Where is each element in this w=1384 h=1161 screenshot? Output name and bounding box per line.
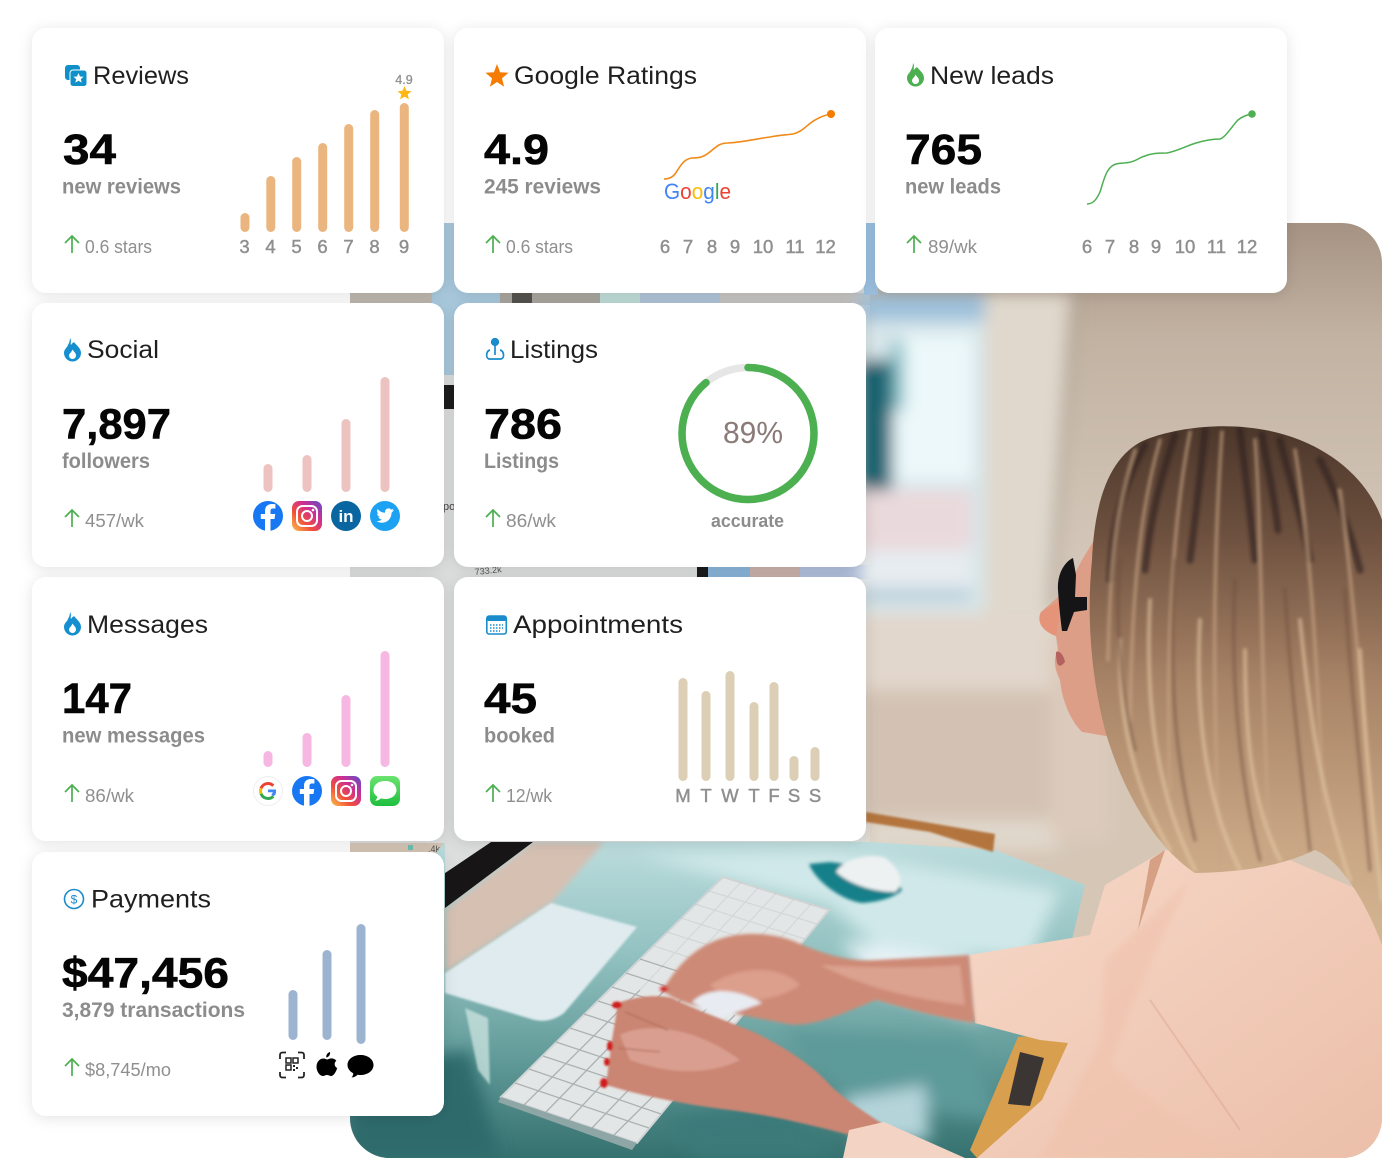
icon: linkedin: in [338,507,354,526]
sub label: 3,879 transactions [62,999,245,1022]
trend arrow [907,236,921,253]
trend arrow [486,785,500,802]
trend arrow [486,510,500,527]
axis labels: 9 [730,236,740,257]
trend arrow [486,236,500,253]
weekday labels: S [788,785,800,806]
icon: blue flame [64,338,81,362]
heading: Payments [91,886,211,914]
panel: Reviews [32,28,444,293]
trend text: 86/wk [506,511,557,531]
icon: speech bubble [348,1055,374,1077]
headline number: 45 [484,675,537,723]
trend arrow [65,510,79,527]
panel: Google Ratings [454,28,866,293]
bar chart [678,671,820,781]
icon: calendar [487,616,506,634]
weekday labels: T [700,785,712,806]
headline number: 765 [905,126,982,174]
weekday labels: F [768,785,780,806]
icon: google [254,776,282,806]
axis labels: 10 [1175,236,1195,257]
axis labels: 8 [707,236,717,257]
photo: monitor screen behind cards: .4k [428,844,441,854]
weekday labels: W [721,785,739,806]
panel: Payments [32,852,444,1116]
photo: wooden desk edge [866,812,995,852]
weekday labels [675,785,821,806]
photo: monitor stand and bezel [445,842,637,1085]
bar axis labels: 9 [399,236,409,257]
bar axis labels: 3 [239,236,250,257]
trend text: 0.6 stars [506,237,573,257]
panel: Social [32,303,444,567]
icon: instagram [292,501,322,531]
axis labels: 7 [683,236,693,257]
bar axis labels: 6 [317,236,328,257]
sub label: new messages [62,724,205,748]
headline number: 4.9 [484,126,549,174]
icon: reviews [65,65,87,86]
axis labels: 12 [815,236,836,257]
icon: apple [316,1052,337,1076]
photo: woman typing at a desk [350,223,1382,1158]
axis labels: 11 [785,236,805,257]
headline number: $47,456 [62,950,229,998]
line chart [1087,110,1256,204]
panel: Appointments [454,577,866,841]
trend text: 86/wk [85,786,135,806]
panel: Messages [32,577,444,841]
sub label: new leads [905,176,1001,198]
sub label: booked [484,724,555,748]
bar chart [288,924,366,1044]
heading: Reviews [93,62,189,90]
axis labels: 6 [1082,236,1092,257]
heading: Google Ratings [514,62,697,90]
bar chart [264,377,390,492]
icon: blue flame [64,612,81,636]
photo: monitor screen behind cards [350,223,878,854]
headline number: 34 [63,126,116,174]
headline number: 7,897 [62,400,171,448]
icon: green flame [907,63,924,86]
photo: screen text fragments: 733.2k [474,564,503,577]
photo: upper hand [660,934,975,1025]
bar chart [240,103,409,232]
heading: Listings [510,336,598,364]
trend arrow [65,236,79,253]
heading: Social [87,336,159,364]
sub label: Listings [484,450,559,473]
icon: messages [370,776,400,806]
icon: QR code [280,1052,304,1078]
icon: linkedin [331,501,361,531]
headline number: 786 [484,400,562,448]
icon: dollar circle: $ [71,892,78,906]
bar chart [264,651,390,767]
panel: New leads [875,28,1287,293]
photo: window and frame [860,293,1110,850]
heading: Appointments [513,611,683,639]
photo: keyboard [498,877,829,1150]
photo: mouse [809,856,902,903]
axis labels [1082,236,1257,257]
sub label: 245 reviews [484,176,601,198]
line chart [664,110,835,179]
photo: monitor screen behind cards: po [443,501,455,513]
heading: New leads [930,62,1054,90]
weekday labels: T [748,785,760,806]
bar axis labels: 4 [265,236,276,257]
trend text: $8,745/mo [85,1060,171,1080]
photo: chair behind the sleeve [970,1033,1075,1158]
trend arrow [65,1059,79,1076]
donut gauge 89% [682,368,814,500]
donut gauge 89%: 89% [723,415,783,450]
photo: sweater body [969,850,1382,1158]
trend text: 0.6 stars [85,237,152,257]
trend text: 457/wk [85,511,145,531]
weekday labels: S [809,785,821,806]
trend arrow [65,785,79,802]
photo: wall background [350,223,1382,1158]
panel: Listings [454,303,866,567]
icon: facebook [292,776,322,806]
axis labels: 11 [1207,236,1226,257]
photo: face [1039,541,1107,736]
icon: instagram [331,776,361,806]
photo: sleeve cuff [843,1122,965,1158]
bar axis labels: 8 [369,236,380,257]
icon: dollar circle [64,890,84,908]
icon: facebook [253,501,283,531]
sub label: new reviews [62,176,181,198]
axis labels [660,236,836,257]
sub label: followers [62,450,150,473]
axis labels: 8 [1129,236,1139,257]
headline number: 147 [62,675,132,723]
rating callout [395,73,413,99]
axis labels: 9 [1151,236,1161,257]
photo: hair [1090,426,1382,945]
photo: glasses [1058,558,1087,631]
logo: Google: Google [664,179,731,204]
icon: star [485,64,509,87]
axis labels: 10 [753,236,773,257]
rating callout: 4.9 [395,73,413,87]
icon: location pin [487,339,504,359]
bar axis labels [239,236,409,257]
trend text: 89/wk [928,237,978,257]
heading: Messages [87,611,208,639]
bar axis labels: 5 [291,236,302,257]
photo: lower hand and forearm [600,996,884,1135]
gauge caption: accurate [711,511,784,531]
axis labels: 7 [1105,236,1115,257]
trend text: 12/wk [506,786,553,806]
axis labels: 12 [1237,236,1257,257]
photo: glass table [350,842,1085,1158]
axis labels: 6 [660,236,670,257]
icon: twitter [370,501,400,531]
bar axis labels: 7 [343,236,354,257]
weekday labels: M [675,785,691,806]
